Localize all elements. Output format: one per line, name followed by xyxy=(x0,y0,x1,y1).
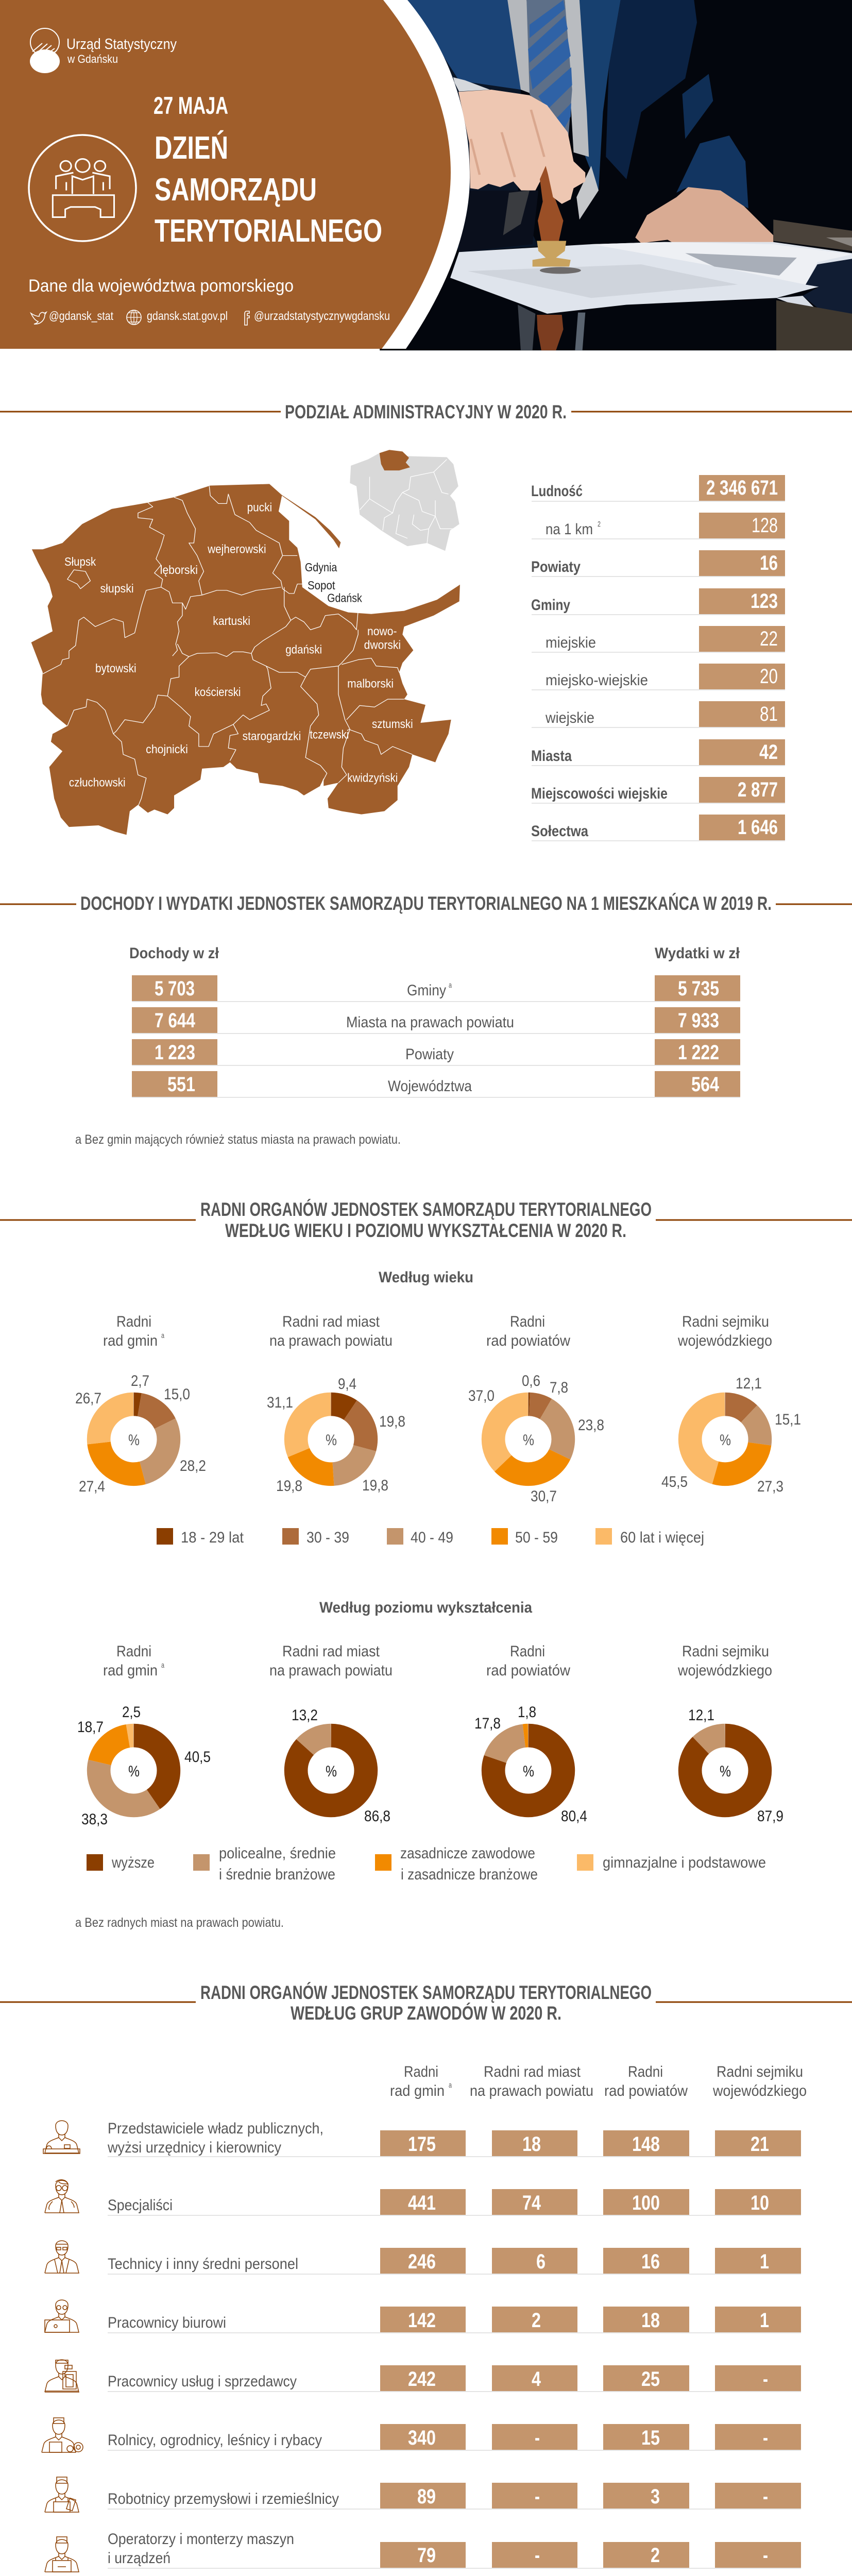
map: Pomeranian voivodeship counties: słupski xyxy=(100,582,134,596)
donut: education, rad miast: % xyxy=(326,1763,337,1780)
legend: age: 30 - 39 xyxy=(306,1529,349,1546)
column titles: age xyxy=(103,1313,772,1349)
row: Miasta na prawach powiatu xyxy=(132,1007,740,1033)
row: Powiaty: 1 222 xyxy=(678,1041,719,1064)
row: Przedstawiciele władz: 18 xyxy=(522,2133,541,2156)
donut: education, rad powiatów: 1,8 xyxy=(518,1704,536,1721)
row: Operatorzy: i urządzeń xyxy=(108,2550,171,2567)
row: Pracownicy usług: 25 xyxy=(641,2368,660,2391)
row: Pracownicy usług xyxy=(45,2360,801,2392)
row: miejskie: miejskie xyxy=(546,634,596,651)
white curved band xyxy=(361,0,470,349)
row: Miejscowości wiejskie xyxy=(531,777,785,803)
heading: WEDŁUG GRUP ZAWODÓW W 2020 R. xyxy=(291,2002,561,2024)
map: Pomeranian voivodeship counties: gdański xyxy=(285,643,322,656)
legend: education: policealne, średnie xyxy=(219,1845,336,1862)
row: Operatorzy: - xyxy=(763,2544,768,2567)
map: Pomeranian voivodeship counties: człuchowski xyxy=(69,776,126,790)
donut: age, sejmik xyxy=(661,1375,801,1495)
heading: RADNI ORGANÓW JEDNOSTEK SAMORZĄDU TERYTORIALNEGO xyxy=(200,1981,652,2003)
row: Sołectwa: 1 646 xyxy=(738,816,778,839)
row: miejsko-wiejskie xyxy=(532,664,785,690)
column titles: education: Radni xyxy=(510,1643,545,1660)
donut: age, sejmik: 15,1 xyxy=(775,1411,801,1428)
donut: age, rad gmin: 28,2 xyxy=(180,1458,206,1475)
footnote: a Bez gmin mających również status miasta na prawach powiatu. xyxy=(75,1132,401,1147)
map: Pomeranian voivodeship counties: Gdańsk xyxy=(327,591,362,605)
donut: age, rad miast: 31,1 xyxy=(267,1394,293,1411)
column titles: education: Radni rad miast xyxy=(282,1643,380,1660)
donut: age, rad powiatów: 7,8 xyxy=(550,1379,568,1396)
map: Pomeranian voivodeship counties: Słupsk xyxy=(64,555,96,569)
row: Robotnicy: Robotnicy przemysłowi i rzemieślnicy xyxy=(108,2490,339,2507)
row: Miasta na prawach powiatu: 7 933 xyxy=(678,1009,719,1032)
donut: education, rad gmin: 2,5 xyxy=(122,1704,141,1721)
row: Operatorzy: - xyxy=(535,2544,540,2567)
row: Miasta na prawach powiatu: 7 644 xyxy=(155,1009,196,1032)
title: SAMORZĄDU xyxy=(155,172,317,208)
row: Przedstawiciele władz: 21 xyxy=(751,2133,769,2156)
column titles: education: rad gmin xyxy=(103,1662,158,1679)
donut: age, rad powiatów: 0,6 xyxy=(522,1372,540,1389)
column titles xyxy=(390,2063,807,2099)
donut: education, rad powiatów: 17,8 xyxy=(474,1715,501,1732)
icon: official at a desk xyxy=(43,2121,80,2154)
row: Specjaliści: 441 xyxy=(408,2192,436,2214)
donut: age, rad gmin: 15,0 xyxy=(164,1386,190,1403)
row: Gminy: 5 703 xyxy=(155,977,195,1000)
map: Pomeranian voivodeship counties: wejherowski xyxy=(207,543,266,556)
row: Pracownicy biurowi: 2 xyxy=(532,2309,541,2332)
row: Pracownicy biurowi: 1 xyxy=(760,2309,769,2332)
row: Rolnicy: - xyxy=(763,2427,768,2449)
map: Pomeranian voivodeship counties: kartuski xyxy=(213,615,250,628)
row: na 1 km2: na 1 km xyxy=(546,521,593,538)
row: Sołectwa xyxy=(531,815,785,841)
row: Technicy: 16 xyxy=(641,2250,660,2273)
column titles: na prawach powiatu xyxy=(470,2082,593,2099)
donut: age, sejmik: 45,5 xyxy=(661,1473,688,1490)
icon: cashier xyxy=(45,2360,79,2392)
donut: age, rad gmin: 2,7 xyxy=(131,1372,149,1389)
map: Pomeranian voivodeship counties: pucki xyxy=(247,501,272,515)
subheading: by education: Według poziomu wykształcenia xyxy=(319,1599,532,1616)
legend: education xyxy=(87,1845,766,1883)
map: Pomeranian voivodeship counties: nowo- xyxy=(367,624,397,638)
row: Przedstawiciele władz: Przedstawiciele władz publicznych, xyxy=(108,2120,323,2137)
legend: age: 40 - 49 xyxy=(411,1529,453,1546)
legend: age: 60 lat i więcej xyxy=(620,1529,704,1546)
column titles: education: Radni xyxy=(116,1643,151,1660)
photo: hand stamping a document xyxy=(380,0,852,350)
row: na 1 km2: 128 xyxy=(752,514,778,537)
row: Ludność xyxy=(531,475,785,501)
column titles: education: wojewódzkiego xyxy=(677,1662,772,1679)
row: Gminy xyxy=(132,975,740,1002)
row: Miasta: 42 xyxy=(759,741,778,764)
column titles: Radni xyxy=(404,2063,438,2080)
row: Przedstawiciele władz: 175 xyxy=(408,2133,436,2156)
heading xyxy=(0,1198,852,1241)
donut: age, rad miast: 19,8 xyxy=(276,1478,302,1495)
donut: education, rad gmin xyxy=(77,1704,211,1828)
row: wiejskie xyxy=(532,701,785,727)
row: Specjaliści: 10 xyxy=(751,2192,769,2214)
row: Technicy: 1 xyxy=(760,2250,769,2273)
social links xyxy=(31,309,390,325)
donut: age, rad miast: % xyxy=(326,1432,337,1449)
map: Pomeranian voivodeship counties: Gdynia xyxy=(305,561,337,574)
column titles: education xyxy=(103,1643,772,1679)
row: Powiaty: Powiaty xyxy=(531,558,581,575)
column titles: rad gmin xyxy=(390,2082,445,2099)
row: wiejskie: 81 xyxy=(760,703,778,725)
row: Gminy xyxy=(531,588,785,615)
column titles: education: na prawach powiatu xyxy=(269,1662,393,1679)
row: Sołectwa: Sołectwa xyxy=(531,823,588,840)
map: Pomeranian voivodeship counties: lęborski xyxy=(160,563,198,577)
map: Pomeranian voivodeship counties: chojnicki xyxy=(146,742,188,756)
row: Gminy: Gminy xyxy=(407,982,446,999)
logo: Urząd Statystyczny w Gdańsku xyxy=(30,28,177,73)
donut: age, rad gmin: 27,4 xyxy=(79,1478,105,1495)
table: administrative statistics xyxy=(531,475,785,841)
donut: education, rad powiatów: 80,4 xyxy=(561,1808,587,1825)
logo: Urząd Statystyczny w Gdańsku: w Gdańsku xyxy=(67,53,118,65)
row: Województwa: 551 xyxy=(167,1073,195,1096)
row: Ludność: 2 346 671 xyxy=(706,477,778,499)
social links: @gdansk_stat xyxy=(49,309,114,323)
donut: education, sejmik: 87,9 xyxy=(757,1808,783,1825)
donut: age, rad gmin xyxy=(75,1372,206,1495)
row: Pracownicy usług: 4 xyxy=(532,2368,541,2391)
map: Pomeranian voivodeship counties: Sopot xyxy=(308,579,335,592)
column titles: Radni xyxy=(628,2063,663,2080)
row: Operatorzy: 2 xyxy=(651,2544,660,2567)
map: Pomeranian voivodeship counties: sztumski xyxy=(372,717,413,731)
donut: education, rad gmin: 18,7 xyxy=(77,1719,104,1736)
legend: age: 18 - 29 lat xyxy=(181,1529,244,1546)
row: miejskie xyxy=(532,626,785,652)
map: Pomeranian voivodeship counties: dworski xyxy=(364,638,401,652)
donut: education, sejmik: % xyxy=(720,1763,731,1780)
panel: administrative division xyxy=(0,401,852,841)
row: Przedstawiciele władz: wyżsi urzędnicy i kierownicy xyxy=(107,2139,281,2156)
row: Powiaty: 16 xyxy=(760,552,778,574)
column titles: age: rad powiatów xyxy=(486,1332,570,1349)
row: Powiaty xyxy=(531,550,785,577)
donut: age, rad powiatów: 37,0 xyxy=(468,1387,495,1404)
row: Przedstawiciele władz xyxy=(43,2120,801,2157)
panel: councillors by occupation xyxy=(0,1981,852,2576)
row: Robotnicy: - xyxy=(763,2485,768,2508)
row: Powiaty: 1 223 xyxy=(155,1041,195,1064)
logo: Urząd Statystyczny w Gdańsku: Urząd Statystyczny xyxy=(66,36,177,53)
column titles: a xyxy=(449,2081,452,2090)
donut: age, rad miast xyxy=(267,1376,405,1495)
row: Pracownicy usług: 242 xyxy=(408,2368,436,2391)
donut: education, rad gmin: 40,5 xyxy=(184,1749,211,1766)
row: miejskie: 22 xyxy=(760,628,778,650)
column headers: Wydatki w zł xyxy=(655,945,740,962)
row: Miasta: Miasta xyxy=(531,748,572,765)
heading: WEDŁUG WIEKU I POZIOMU WYKSZTAŁCENIA W 2020 R. xyxy=(225,1220,626,1241)
donut: education, sejmik: 12,1 xyxy=(688,1707,714,1724)
title: DZIEŃ xyxy=(155,130,228,166)
row: Pracownicy usług: Pracownicy usług i sprzedawcy xyxy=(108,2373,297,2390)
social links: @urzadstatystycznywgdansku xyxy=(254,309,390,323)
donut: age, rad miast: 19,8 xyxy=(379,1413,405,1430)
heading xyxy=(0,1981,852,2024)
row: Robotnicy: - xyxy=(535,2485,540,2508)
panel: income and expenditure xyxy=(0,893,852,1147)
row: Powiaty xyxy=(132,1039,740,1065)
title xyxy=(154,92,382,249)
row: Rolnicy: 15 xyxy=(641,2427,660,2449)
row: Specjaliści: Specjaliści xyxy=(108,2197,173,2214)
row: Technicy: 246 xyxy=(408,2250,436,2273)
column titles: age: Radni xyxy=(116,1313,151,1330)
row: Technicy xyxy=(45,2241,801,2274)
donut: age, rad powiatów: 30,7 xyxy=(531,1488,557,1505)
column titles: age: na prawach powiatu xyxy=(269,1332,393,1349)
donut: education, rad miast: 13,2 xyxy=(292,1707,318,1724)
donut: age, rad gmin: 26,7 xyxy=(75,1390,101,1407)
legend: education: i zasadnicze branżowe xyxy=(401,1866,538,1883)
row: wiejskie: wiejskie xyxy=(545,709,594,726)
legend: age: 50 - 59 xyxy=(515,1529,558,1546)
row: Technicy: Technicy i inny średni personel xyxy=(108,2256,298,2273)
row: Specjaliści: 100 xyxy=(632,2192,660,2214)
donut: age, rad powiatów: % xyxy=(523,1432,534,1449)
icon: machine operator xyxy=(45,2537,79,2572)
row: Robotnicy: 3 xyxy=(651,2485,660,2508)
column titles: wojewódzkiego xyxy=(712,2082,807,2099)
donut: age, rad powiatów xyxy=(468,1372,604,1505)
column titles: education: rad powiatów xyxy=(486,1662,570,1679)
donut: education, rad miast xyxy=(292,1707,390,1825)
row: Pracownicy biurowi: 142 xyxy=(408,2309,436,2332)
icon: office worker with laptop xyxy=(45,2300,79,2332)
donut: education, rad miast: 86,8 xyxy=(364,1808,390,1825)
donut: education, sejmik xyxy=(688,1707,783,1825)
legend: education: i średnie branżowe xyxy=(219,1866,335,1883)
legend: education: gimnazjalne i podstawowe xyxy=(603,1854,766,1871)
map: Pomeranian voivodeship counties: kościerski xyxy=(195,685,241,699)
row: Operatorzy xyxy=(45,2531,801,2572)
donut: education, rad powiatów xyxy=(474,1704,587,1825)
row: Technicy: 6 xyxy=(536,2250,546,2273)
row: Województwa: Województwa xyxy=(388,1078,472,1095)
column titles: rad powiatów xyxy=(604,2082,688,2099)
row: Miejscowości wiejskie: 2 877 xyxy=(738,778,778,801)
row: Województwa xyxy=(132,1071,740,1097)
row: na 1 km2 xyxy=(532,513,785,539)
column titles: age: Radni rad miast xyxy=(282,1313,380,1330)
legend: education: wyższe xyxy=(111,1854,155,1871)
row: miejsko-wiejskie: miejsko-wiejskie xyxy=(546,672,648,689)
column titles: education: Radni sejmiku xyxy=(682,1643,769,1660)
heading: RADNI ORGANÓW JEDNOSTEK SAMORZĄDU TERYTORIALNEGO xyxy=(200,1198,652,1220)
map: Pomeranian voivodeship counties xyxy=(31,484,460,835)
row: Operatorzy: 79 xyxy=(417,2544,436,2567)
row: miejsko-wiejskie: 20 xyxy=(760,665,778,688)
map: Pomeranian voivodeship counties: tczewski xyxy=(310,728,349,742)
column titles: age: rad gmin xyxy=(103,1332,158,1349)
row: Pracownicy biurowi: Pracownicy biurowi xyxy=(108,2314,226,2331)
brown panel xyxy=(0,0,451,349)
row: Gminy: Gminy xyxy=(531,597,570,614)
row: Rolnicy: Rolnicy, ogrodnicy, leśnicy i rybacy xyxy=(108,2432,322,2449)
row: Ludność: Ludność xyxy=(531,483,583,500)
donut: age, rad gmin: % xyxy=(128,1432,140,1449)
donut: age, rad powiatów: 23,8 xyxy=(578,1417,604,1434)
donut: age, sejmik: 12,1 xyxy=(736,1375,762,1392)
row: Robotnicy xyxy=(45,2477,801,2512)
row: Pracownicy biurowi xyxy=(45,2300,801,2333)
icon: farmer with tractor xyxy=(42,2418,83,2452)
panel: councillors by age and education xyxy=(0,1198,852,1930)
row: Rolnicy xyxy=(42,2418,801,2452)
row: Powiaty: Powiaty xyxy=(405,1046,454,1063)
row: Rolnicy: 340 xyxy=(408,2427,436,2449)
map: Pomeranian voivodeship counties: bytowski xyxy=(95,662,137,675)
row: Gminy: a xyxy=(449,981,452,990)
map: Pomeranian voivodeship counties: kwidzyński xyxy=(347,771,398,785)
icon: specialist with glasses xyxy=(45,2180,79,2213)
title: TERYTORIALNEGO xyxy=(155,213,382,249)
column titles: Radni sejmiku xyxy=(717,2063,803,2080)
legend: age xyxy=(157,1528,704,1546)
row: Miasta na prawach powiatu: Miasta na prawach powiatu xyxy=(346,1014,514,1031)
row: Specjaliści xyxy=(45,2180,801,2215)
heading: PODZIAŁ ADMINISTRACYJNY W 2020 R. xyxy=(285,401,567,422)
subtitle: Dane dla województwa pomorskiego xyxy=(28,276,294,296)
row: Gminy: 5 735 xyxy=(678,977,719,1000)
row: Specjaliści: 74 xyxy=(522,2192,541,2214)
donut: education, rad gmin: 38,3 xyxy=(81,1811,108,1828)
column headers: Dochody w zł xyxy=(129,945,219,962)
map: Pomeranian voivodeship counties: starogardzki xyxy=(243,730,301,743)
row: Przedstawiciele władz: 148 xyxy=(632,2133,660,2156)
map: Pomeranian voivodeship counties: malborski xyxy=(347,677,394,690)
title: 27 MAJA xyxy=(154,92,228,119)
row: Miasta xyxy=(531,739,785,766)
row: Rolnicy: - xyxy=(535,2427,540,2449)
row: Pracownicy biurowi: 18 xyxy=(641,2309,660,2332)
row: na 1 km2: 2 xyxy=(598,520,601,529)
column titles: education: a xyxy=(161,1661,164,1670)
social links: gdansk.stat.gov.pl xyxy=(147,309,228,323)
column titles: age: Radni xyxy=(510,1313,545,1330)
column titles: Radni rad miast xyxy=(484,2063,581,2080)
column titles: age: Radni sejmiku xyxy=(682,1313,769,1330)
row: Województwa: 564 xyxy=(691,1073,720,1096)
donut: age, sejmik: 27,3 xyxy=(757,1478,783,1495)
icon: industrial worker xyxy=(45,2477,79,2512)
column titles: age: wojewódzkiego xyxy=(677,1332,772,1349)
header banner xyxy=(0,0,852,350)
donut: age, rad miast: 9,4 xyxy=(338,1376,356,1393)
row: Pracownicy usług: - xyxy=(763,2368,768,2391)
row: Operatorzy: Operatorzy i monterzy maszyn xyxy=(108,2531,294,2548)
legend: education: zasadnicze zawodowe xyxy=(400,1845,535,1862)
row: Robotnicy: 89 xyxy=(417,2485,436,2508)
donut: education, rad powiatów: % xyxy=(523,1763,534,1780)
map: Poland locator xyxy=(350,450,459,551)
row: Gminy: 123 xyxy=(751,590,778,613)
row: Miejscowości wiejskie: Miejscowości wiejskie xyxy=(531,785,668,802)
donut: age, rad miast: 19,8 xyxy=(362,1477,388,1494)
icon: councillors at a table xyxy=(29,135,136,241)
subheading: by age: Według wieku xyxy=(379,1269,473,1286)
icon: technician with headset xyxy=(45,2241,79,2273)
donut: education, rad gmin: % xyxy=(128,1763,140,1780)
footnote: a Bez radnych miast na prawach powiatu. xyxy=(75,1916,284,1930)
column headers xyxy=(129,945,740,962)
donut: age, sejmik: % xyxy=(720,1432,731,1449)
column titles: age: a xyxy=(161,1331,164,1340)
